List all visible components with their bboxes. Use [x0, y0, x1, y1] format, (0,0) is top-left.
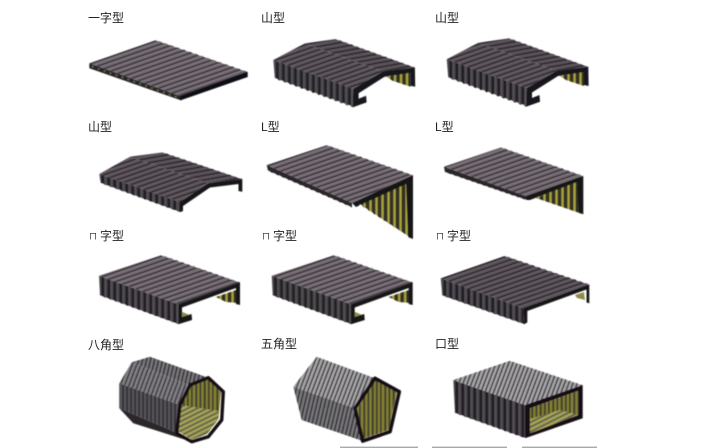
label: ㄇ字型 col 1: ㄇ	[89, 232, 97, 241]
bellows cover: flat type	[89, 39, 248, 100]
bellows cover: pentagonal type	[293, 357, 399, 441]
bellows cover: L type A	[267, 144, 413, 239]
label: 山型 col 3 row 1: 山型	[435, 11, 459, 25]
cropped rules at bottom edge	[340, 447, 597, 448]
bellows cover: channel type A	[99, 254, 240, 325]
label: L型 col 2: L型	[261, 120, 280, 134]
label: ㄇ字型 col 3: 字型	[447, 228, 471, 243]
label: 八角型: 八角型	[88, 338, 124, 352]
label: 山型 row 2: 山型	[88, 120, 112, 134]
label: ㄇ字型 col 1: 字型	[100, 228, 124, 243]
label: 口型: 口型	[435, 337, 459, 351]
label: 山型 col 2 row 1: 山型	[261, 11, 285, 25]
label: ㄇ字型 col 3: ㄇ	[436, 232, 444, 241]
label: ㄇ字型 col 2: ㄇ	[262, 232, 270, 241]
bellows cover: channel type C	[441, 255, 589, 325]
bellows cover: octagonal type	[119, 357, 223, 442]
bellows cover: channel type B	[272, 254, 413, 325]
label: 一字型: 一字型	[88, 10, 124, 25]
bellows cover: mountain type B	[447, 38, 589, 107]
bellows cover: rectangular type	[453, 360, 583, 439]
label: 五角型: 五角型	[261, 337, 297, 351]
bellows cover: L type B	[444, 147, 583, 214]
label: ㄇ字型 col 2: 字型	[273, 228, 297, 243]
bellows cover: mountain type A	[273, 38, 415, 108]
label: L型 col 3: L型	[435, 120, 454, 134]
bellows cover: low mountain type	[99, 152, 242, 213]
